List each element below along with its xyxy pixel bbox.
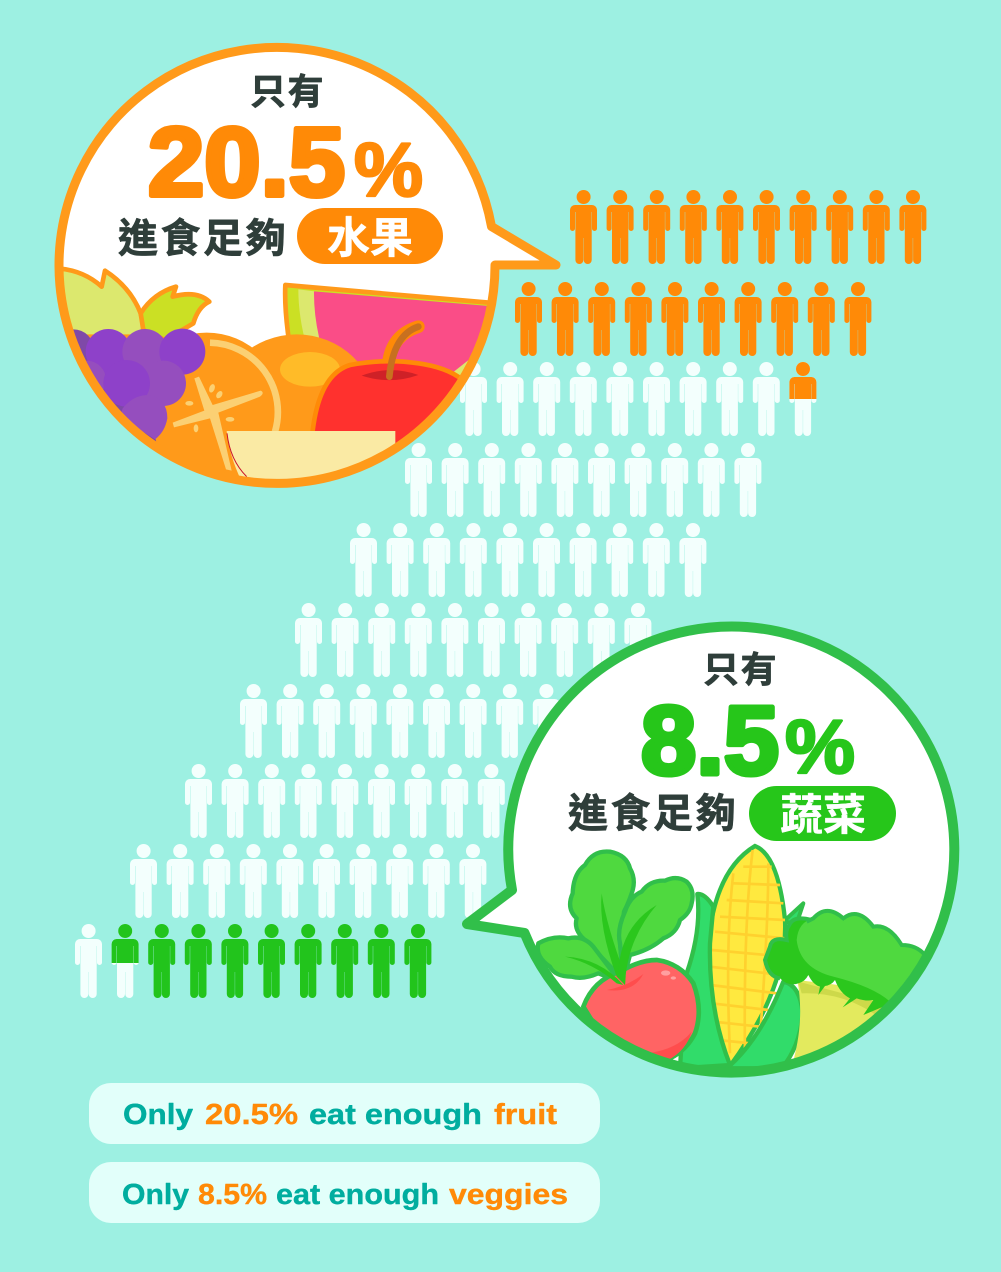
- row 1: orange people: [570, 190, 926, 264]
- caption: veggies: veggies: [449, 1179, 568, 1211]
- row 7: white people: [240, 684, 596, 758]
- panel: vegetable speech bubble: [467, 627, 954, 1077]
- caption: fruit: fruit: [494, 1099, 557, 1131]
- orange slice: [156, 332, 282, 476]
- corn husks: [680, 894, 803, 1068]
- number: 8.5%: [641, 686, 855, 795]
- partly orange person: [789, 362, 816, 399]
- number: 20.5%: [148, 108, 423, 216]
- caption: veggies: eat enough: [276, 1179, 439, 1211]
- caption: fruit: [89, 1083, 600, 1144]
- caption: veggies: 8.5%: [198, 1179, 267, 1211]
- radish: [583, 960, 699, 1077]
- number: 20.5%: 20.5: [148, 108, 345, 216]
- row 9: white people: [130, 844, 486, 918]
- caption: fruit: eat enough: [309, 1099, 482, 1131]
- leaf right: [141, 287, 209, 340]
- text: only: 只有: [703, 649, 778, 690]
- number: 8.5%: 8.5: [641, 686, 779, 795]
- bubble outline: [59, 47, 556, 483]
- row 3: white people: [460, 362, 816, 436]
- panel: fruit speech bubble: [53, 47, 556, 497]
- row 4: white people: [405, 443, 761, 517]
- row 5: white people: [350, 523, 706, 597]
- bubble outline: [467, 627, 954, 1073]
- leaf left: [57, 268, 147, 337]
- number: 20.5%: %: [354, 128, 423, 213]
- watermelon: [282, 282, 488, 372]
- row 10: white people: [75, 924, 139, 998]
- pictogram: 100 people: [75, 190, 926, 998]
- row 6: white people: [295, 603, 651, 677]
- grapes: [73, 328, 206, 442]
- big orange: [252, 334, 358, 431]
- text: eat enough: 進食足夠: [568, 792, 738, 836]
- apple slice: [226, 431, 396, 479]
- bubble fill: [467, 627, 954, 1073]
- illustration: fruit: [64, 266, 488, 479]
- partly green person: [112, 924, 139, 963]
- caption: veggies: Only: [122, 1179, 189, 1211]
- pill: vegetables: [749, 786, 896, 841]
- bubble fill: [59, 47, 556, 483]
- pill: fruit: [297, 208, 443, 264]
- illustration: vegetables: [538, 846, 925, 1077]
- small corn leaf: [783, 903, 803, 923]
- row 2: orange people: [515, 282, 871, 356]
- apple: [310, 320, 460, 444]
- caption: fruit: Only: [123, 1099, 193, 1131]
- small leaf behind apple: [454, 360, 468, 376]
- text: only: 只有: [250, 71, 325, 112]
- number: 8.5%: %: [785, 705, 855, 790]
- radish leaf veins: [565, 893, 657, 985]
- caption: fruit: 20.5%: [205, 1099, 298, 1131]
- pill: vegetables: 蔬菜: [780, 792, 866, 840]
- broccoli: [763, 911, 925, 1077]
- radish leaves: [538, 851, 693, 982]
- text: eat enough: 進食足夠: [118, 217, 288, 261]
- row 8: white people: [185, 764, 541, 838]
- pill: fruit: 水果: [327, 215, 413, 263]
- caption: veggies: [89, 1162, 600, 1223]
- row 10: green people: [148, 924, 431, 998]
- corn: [708, 846, 785, 1066]
